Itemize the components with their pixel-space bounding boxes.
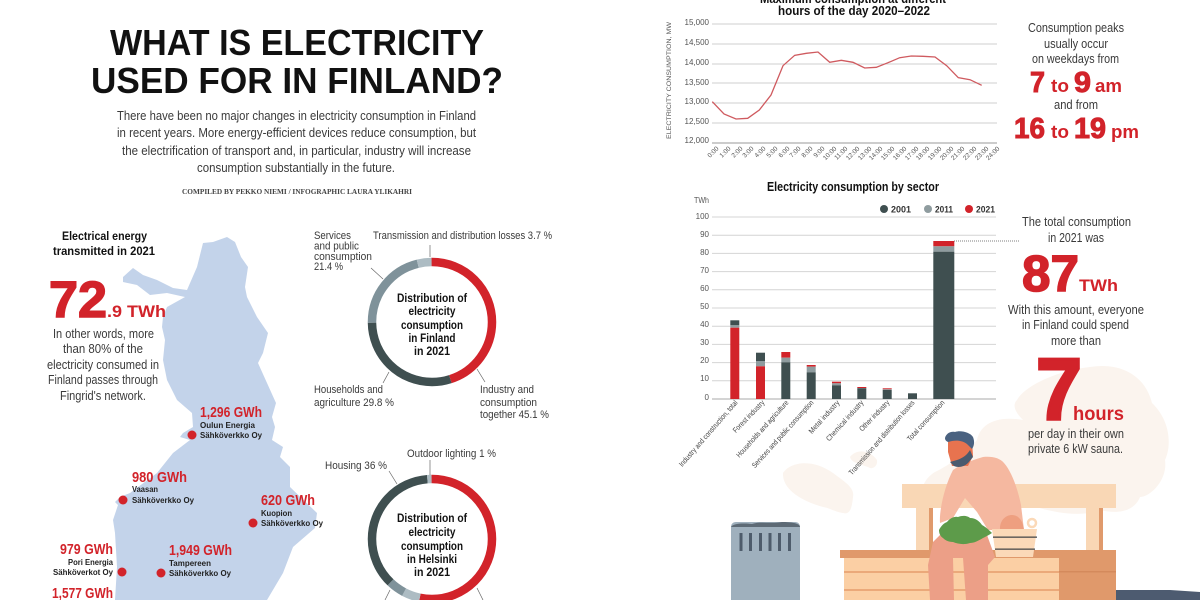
sector labels: [677, 398, 946, 477]
text: total consumption 87 TWh and sauna comparison: private 6 kW sauna.: [1028, 441, 1123, 456]
title: [91, 22, 503, 101]
line chart title: hours of the day 2020–2022: [778, 3, 930, 18]
sector labels: Services and public consumption: [750, 398, 815, 470]
heading: electrical energy transmitted: transmitted in 2021: [53, 244, 155, 258]
donut labels: Finland: Industry and: [480, 384, 534, 396]
intro text: There have been no major changes in electricity consumption in Finland: [117, 108, 476, 123]
bar chart: consumption by sector: [677, 179, 1020, 477]
donut labels: Finland: together 45.1 %: [480, 409, 549, 421]
donut labels: Helsinki: Housing 36 %: [325, 460, 387, 472]
text: total consumption 87 TWh and sauna comparison: The total consumption: [1022, 214, 1131, 229]
heading: electrical energy transmitted: Electrical energy: [62, 229, 147, 243]
map label: Tampere: [156, 542, 232, 578]
bench front: [840, 550, 1116, 600]
bars: [730, 241, 954, 399]
line chart: maximum consumption by hour: 15:00: [880, 145, 897, 162]
intro text: [117, 108, 476, 175]
map label: Vaasa: Vaasan: [132, 485, 158, 494]
bar chart: consumption by sector: 80: [700, 248, 710, 257]
line chart: maximum consumption by hour: 4:00: [754, 145, 768, 159]
line chart: maximum consumption by hour: 12:00: [845, 145, 862, 162]
bar chart title: Electricity consumption by sector: [767, 179, 939, 194]
sauna stove: [731, 522, 800, 600]
legend: 2021: [976, 204, 995, 214]
sector labels: Households and agriculture: [734, 398, 790, 459]
text: consumption peaks: 9: [1074, 67, 1091, 99]
line chart: maximum consumption by hour: [666, 0, 1002, 162]
map label: Tampere: 1,949 GWh: [169, 542, 232, 559]
line chart: maximum consumption by hour: 1:00: [719, 145, 733, 159]
text: total consumption 87 TWh and sauna comparison: 7: [1036, 341, 1082, 438]
text: consumption peaks: to: [1051, 122, 1069, 142]
line chart: maximum consumption by hour: 16:00: [892, 145, 909, 162]
map label: Vaasa: 980 GWh: [132, 469, 187, 486]
map label: Oulu: Oulun Energia: [200, 421, 256, 430]
donut labels: Finland: Services: [314, 230, 351, 242]
sector labels: Other industry: [857, 398, 892, 433]
bar chart: consumption by sector: 90: [700, 230, 710, 239]
line chart: maximum consumption by hour: 19:00: [927, 145, 944, 162]
bar chart: consumption by sector: 60: [700, 284, 710, 293]
line chart: maximum consumption by hour: 0:00: [707, 145, 721, 159]
donut chart: Finland: consumption: [401, 318, 463, 332]
line chart: maximum consumption by hour: 14,500: [685, 38, 710, 47]
legend: 2011: [935, 204, 953, 214]
donut chart: Finland: [372, 262, 492, 382]
bar chart: consumption by sector: 70: [700, 266, 710, 275]
sector labels: Chemical industry: [824, 398, 866, 443]
sector labels: Metal industry: [807, 398, 842, 436]
stat: 72.9 TWh: [49, 271, 166, 328]
wooden bucket: [992, 519, 1037, 557]
text: total consumption 87 TWh and sauna comparison: 87: [1022, 245, 1079, 302]
line chart: maximum consumption by hour: 13,000: [685, 97, 710, 106]
donut labels: Finland: consumption: [314, 251, 372, 263]
text: consumption peaks: pm: [1111, 122, 1139, 142]
line chart: maximum consumption by hour: 14:00: [868, 145, 885, 162]
donut labels: Finland: agriculture 29.8 %: [314, 397, 394, 409]
donut labels: Helsinki: Outdoor lighting 1 %: [407, 448, 496, 460]
text: total consumption 87 TWh and sauna comparison: hours: [1073, 404, 1124, 425]
intro text: consumption substantially in the future.: [197, 160, 395, 175]
text: share of electricity through Fingrid: [47, 326, 159, 403]
intro text: the electrification of transport and, in particular, industry will increase: [122, 143, 471, 158]
donut chart: Helsinki: consumption: [401, 539, 463, 553]
text: share of electricity through Fingrid: In other words, more: [53, 326, 154, 341]
donut chart: Finland: in 2021: [414, 344, 450, 358]
text: consumption peaks: am: [1095, 76, 1122, 96]
map label: Pori: Sähköverkot Oy: [53, 568, 114, 577]
map label: Oulu: Sähköverkko Oy: [200, 431, 263, 440]
stat: 72.9 TWh: .9 TWh: [107, 302, 166, 321]
bar chart: consumption by sector: 20: [700, 356, 710, 365]
donut chart: Helsinki: [372, 479, 492, 599]
title: WHAT IS ELECTRICITY: [110, 22, 484, 63]
text: consumption peaks: 19: [1074, 113, 1106, 145]
donut chart: Finland: in Finland: [408, 331, 456, 345]
sector labels: Industry and construction, total: [677, 398, 740, 468]
line chart: maximum consumption by hour: 10:00: [822, 145, 839, 162]
line chart: maximum consumption by hour: 11:00: [833, 145, 850, 162]
text: consumption peaks: and from: [1054, 97, 1098, 112]
donut labels: Finland: [314, 230, 552, 421]
stat: 72.9 TWh: 72: [49, 271, 107, 328]
bar chart: consumption by sector: 10: [700, 374, 710, 383]
map label: Oulu: [188, 404, 263, 440]
text: consumption peaks: usually occur: [1044, 36, 1109, 51]
donut labels: Finland: Transmission and distribution losses 3.7 %: [373, 230, 552, 242]
sector labels: Forest industry: [731, 398, 767, 435]
map label: Pori: [53, 541, 126, 577]
steam clouds: [783, 366, 1169, 514]
donut labels: Helsinki: [325, 448, 496, 600]
line chart: maximum consumption by hour: ELECTRICITY CONSUMPTION, MW: [666, 21, 673, 139]
text: share of electricity through Fingrid: Fingrid's network.: [60, 388, 146, 403]
line chart: maximum consumption by hour: 5:00: [766, 145, 780, 159]
map label: Tampere: Tampereen: [169, 559, 211, 568]
bar chart: consumption by sector: TWh: [694, 196, 709, 205]
map label: Kuopio: [248, 492, 324, 528]
line chart: maximum consumption by hour: 13:00: [857, 145, 874, 162]
donut labels: Finland: consumption: [480, 397, 537, 409]
text: share of electricity through Fingrid: Finland passes through: [48, 372, 158, 387]
text: total consumption 87 TWh and sauna comparison: TWh: [1079, 276, 1118, 295]
text: consumption peaks: on weekdays from: [1032, 51, 1119, 66]
text: share of electricity through Fingrid: than 80% of the: [63, 341, 143, 356]
map label: Oulu: 1,296 GWh: [200, 404, 262, 421]
donut chart: Finland: electricity: [408, 304, 456, 318]
line chart: maximum consumption by hour: 13,500: [685, 78, 710, 87]
title: USED FOR IN FINLAND?: [91, 60, 503, 101]
donut chart: Finland: Distribution of: [397, 291, 468, 305]
line chart: maximum consumption by hour: 23:00: [974, 145, 991, 162]
line chart: maximum consumption by hour: 8:00: [801, 145, 815, 159]
line chart: maximum consumption by hour: 15,000: [685, 18, 710, 27]
donut labels: Finland: Households and: [314, 384, 383, 396]
text: total consumption 87 TWh and sauna comparison: more than: [1051, 333, 1101, 348]
bar chart: consumption by sector: 40: [700, 320, 710, 329]
map label: Kuopio: 620 GWh: [261, 492, 315, 509]
text: consumption peaks: [1014, 20, 1139, 145]
line chart: maximum consumption by hour: 14,000: [685, 58, 710, 67]
text: consumption peaks: 16: [1014, 113, 1045, 145]
line chart: maximum consumption by hour: 9:00: [813, 145, 827, 159]
map label: Pori: Pori Energia: [68, 558, 114, 567]
line chart: maximum consumption by hour: 22:00: [962, 145, 979, 162]
person: [928, 431, 1024, 600]
donut chart: Helsinki: electricity: [408, 525, 456, 539]
legend: 2001: [891, 204, 911, 214]
map label: Pori: 979 GWh: [60, 541, 113, 558]
bar chart: consumption by sector: 50: [700, 302, 710, 311]
floor: [1116, 590, 1200, 600]
map label: Tampere: Sähköverkko Oy: [169, 569, 232, 578]
text: consumption peaks: Consumption peaks: [1028, 20, 1124, 35]
intro text: in recent years. More energy-efficient devices reduce consumption, but: [117, 125, 476, 140]
text: total consumption 87 TWh and sauna comparison: in 2021 was: [1048, 230, 1104, 245]
text: total consumption 87 TWh and sauna comparison: per day in their own: [1028, 426, 1124, 441]
donut chart: Helsinki: Distribution of: [397, 511, 468, 525]
line chart: maximum consumption by hour: 6:00: [778, 145, 792, 159]
line chart: maximum consumption by hour: 17:00: [904, 145, 921, 162]
line chart: maximum consumption by hour: 24:00: [985, 145, 1002, 162]
bar chart: consumption by sector: 30: [700, 338, 710, 347]
map of Finland: [113, 237, 317, 600]
heading: electrical energy transmitted: [53, 229, 155, 258]
donut labels: Finland: 21.4 %: [314, 261, 343, 273]
sector labels: Transmission and distribution losses: [847, 398, 917, 477]
legend: [880, 204, 995, 214]
text: total consumption 87 TWh and sauna comparison: [1008, 214, 1144, 456]
map label: Vaasa: Sähköverkko Oy: [132, 496, 195, 505]
bar chart: consumption by sector: 100: [696, 212, 710, 221]
text: total consumption 87 TWh and sauna comparison: in Finland could spend: [1022, 317, 1129, 332]
map label: Kuopio: Sähköverkko Oy: [261, 519, 324, 528]
text: consumption peaks: 7: [1030, 67, 1045, 99]
line chart: maximum consumption by hour: 20:00: [939, 145, 956, 162]
byline: COMPILED BY PEKKO NIEMI / INFOGRAPHIC LAURA YLIKAHRI: [182, 187, 412, 196]
text: share of electricity through Fingrid: electricity consumed in: [47, 357, 159, 372]
line chart: maximum consumption by hour: 18:00: [915, 145, 932, 162]
line chart: maximum consumption by hour: 12,500: [685, 117, 710, 126]
sauna illustration: [731, 431, 1200, 600]
line chart: maximum consumption by hour: 21:00: [950, 145, 967, 162]
text: consumption peaks: to: [1051, 76, 1069, 96]
donut labels: Finland: and public: [314, 240, 359, 252]
bench supports: [916, 508, 1103, 550]
bar chart: consumption by sector: 0: [705, 393, 710, 402]
sector labels: Total consumption: [905, 398, 946, 443]
birch whisk: [939, 516, 992, 544]
map label: Vaasa: [118, 469, 195, 505]
donut chart: Helsinki: in Helsinki: [407, 552, 457, 566]
line chart: maximum consumption by hour: 12,000: [685, 136, 710, 145]
line chart: maximum consumption by hour: 3:00: [742, 145, 756, 159]
bench backrest: [902, 484, 1116, 508]
line chart: maximum consumption by hour: 2:00: [731, 145, 745, 159]
line chart: maximum consumption by hour: 7:00: [789, 145, 803, 159]
map label: Kuopio: Kuopion: [261, 509, 292, 518]
text: total consumption 87 TWh and sauna comparison: With this amount, everyone: [1008, 302, 1144, 317]
donut chart: Helsinki: in 2021: [414, 565, 450, 579]
